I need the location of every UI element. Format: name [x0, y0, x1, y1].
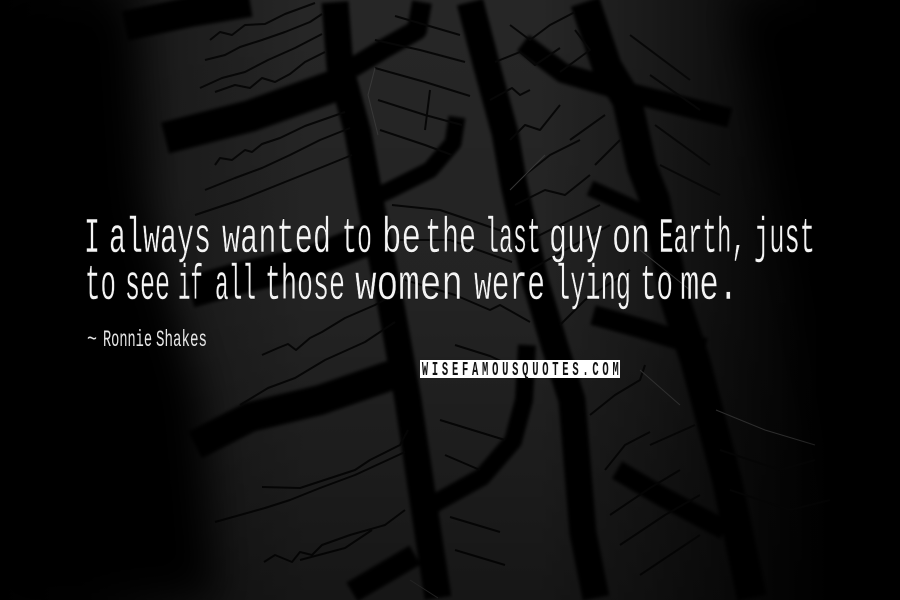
author attribution: [87, 327, 207, 353]
tread sipes: [195, 3, 830, 575]
quote line 1: [84, 211, 815, 268]
right shadow: [735, 0, 900, 600]
quote line 2: those: [265, 258, 345, 315]
quote line 2: women: [355, 258, 463, 315]
quote line 1: guy: [549, 211, 603, 268]
quote line 2: if: [178, 258, 203, 315]
quote line 2: all: [215, 258, 256, 315]
quote line 1: be: [382, 211, 421, 268]
quote line 1: I: [84, 211, 100, 268]
quote line 1: the: [425, 211, 476, 268]
quote line 2: me.: [680, 258, 738, 315]
quote line 2: see: [125, 258, 170, 315]
quote line 1: last: [485, 211, 541, 268]
quote line 2: [85, 258, 738, 315]
quote line 1: to: [342, 211, 372, 268]
quote line 2: to: [640, 258, 673, 315]
quote line 2: were: [474, 258, 545, 315]
tread grooves: [125, 2, 752, 598]
quote text: [84, 211, 815, 315]
left shadow: [0, 0, 215, 600]
author attribution: Ronnie: [103, 327, 152, 353]
author attribution: ~: [87, 327, 97, 353]
quote line 1: wanted: [222, 211, 331, 268]
watermark logo: WISEFAMOUSQUOTES.COM: [422, 359, 619, 381]
quote line 1: on: [612, 211, 650, 268]
quote line 1: Earth,: [659, 211, 746, 268]
quote line 1: just: [754, 211, 815, 268]
author attribution: Shakes: [156, 327, 207, 353]
tread highlights: [368, 68, 815, 598]
quote line 2: lying: [555, 258, 631, 315]
quote line 1: always: [109, 211, 211, 268]
quote line 2: to: [85, 258, 116, 315]
